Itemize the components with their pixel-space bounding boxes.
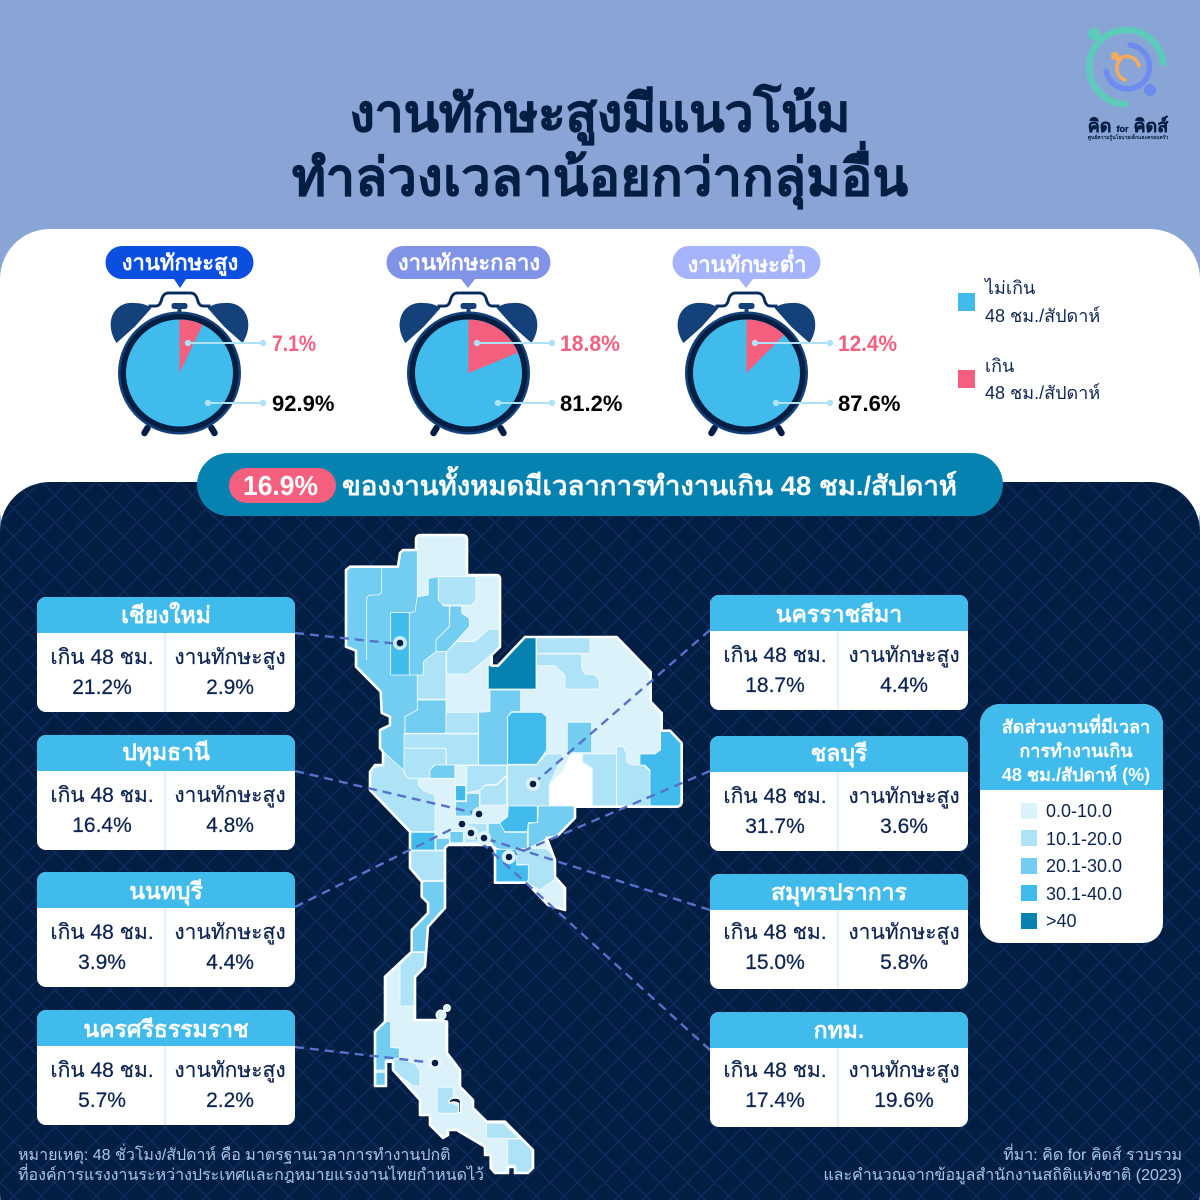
card: นครศรีธรรมราช: 5.7% xyxy=(78,1089,126,1112)
card: นนทบุรี: 3.9% xyxy=(78,951,126,974)
legend: hours: เกิน xyxy=(985,356,1014,376)
tag: งานทักษะต่ำ: งานทักษะต่ำ xyxy=(688,248,806,277)
clock: mid skill: 18.8% xyxy=(560,331,620,356)
card: นครศรีธรรมราช: งานทักษะสูง xyxy=(174,1059,286,1083)
tag: งานทักษะกลาง xyxy=(387,246,550,288)
card: นครศรีธรรมราช: นครศรีธรรมราช xyxy=(83,1016,249,1042)
clock: high skill xyxy=(111,293,334,434)
card: นนทบุรี: เกิน 48 ชม. xyxy=(50,921,154,944)
card: สมุทรปราการ xyxy=(710,874,968,989)
card: นนทบุรี xyxy=(37,872,295,987)
card: นครศรีธรรมราช: 2.2% xyxy=(206,1089,254,1112)
card: นครราชสีมา: 18.7% xyxy=(745,674,805,697)
tag: งานทักษะสูง xyxy=(106,246,254,288)
clock: mid skill: 81.2% xyxy=(560,391,622,416)
card: กทม.: กทม. xyxy=(814,1017,864,1043)
legend: hours: 48 ชม./สัปดาห์ xyxy=(985,383,1100,403)
card: กทม.: 17.4% xyxy=(745,1089,805,1112)
map legend: 48 ชม./สัปดาห์ (%) xyxy=(1002,764,1150,785)
banner xyxy=(197,453,1003,516)
legend: hours: 48 ชม./สัปดาห์ xyxy=(985,306,1100,326)
map legend: 0.0-10.0 xyxy=(1046,801,1112,821)
clock: high skill: 7.1% xyxy=(272,331,316,356)
source: และคำนวณจากข้อมูลสำนักงานสถิติแห่งชาติ (2023) xyxy=(823,1166,1182,1185)
logo: คิด for คิดส์ xyxy=(1088,28,1169,142)
card: ชลบุรี: งานทักษะสูง xyxy=(848,785,960,809)
logo: คิด for คิดส์: คิด for คิดส์ xyxy=(1088,115,1169,136)
clock: low skill xyxy=(678,293,900,434)
map legend: 30.1-40.0 xyxy=(1046,884,1122,904)
card: ชลบุรี: เกิน 48 ชม. xyxy=(723,785,827,808)
map legend: 10.1-20.0 xyxy=(1046,829,1122,849)
title: งานทักษะสูงมีแนวโน้ม xyxy=(350,83,850,146)
card: สมุทรปราการ: งานทักษะสูง xyxy=(848,921,960,945)
map legend: สัดส่วนงานที่มีเวลา xyxy=(1002,714,1150,737)
card: ปทุมธานี: เกิน 48 ชม. xyxy=(50,784,154,807)
card: เชียงใหม่: เชียงใหม่ xyxy=(121,601,211,628)
card: สมุทรปราการ: สมุทรปราการ xyxy=(771,879,908,907)
map legend: 20.1-30.0 xyxy=(1046,856,1122,876)
tag: งานทักษะสูง: งานทักษะสูง xyxy=(122,250,238,277)
card: สมุทรปราการ: 5.8% xyxy=(880,951,928,974)
card: นนทบุรี: งานทักษะสูง xyxy=(174,921,286,945)
map legend: >40 xyxy=(1046,911,1077,931)
clock: low skill: 87.6% xyxy=(838,391,900,416)
clock: high skill: 92.9% xyxy=(272,391,334,416)
card: นนทบุรี: 4.4% xyxy=(206,951,254,974)
banner: 16.9% xyxy=(243,470,318,501)
logo: คิด for คิดส์: ศูนย์ความรู้นโยบายเด็กและครอบครัว xyxy=(1088,133,1168,142)
card: กทม.: เกิน 48 ชม. xyxy=(723,1059,827,1082)
note: ที่องค์การแรงงานระหว่างประเทศและกฎหมายแรงงานไทยกำหนดไว้ xyxy=(18,1163,484,1184)
map legend: การทำงานเกิน xyxy=(1019,741,1133,761)
card: เชียงใหม่ xyxy=(37,597,295,712)
map markers xyxy=(393,636,540,1070)
card: ปทุมธานี: 16.4% xyxy=(72,814,132,837)
card: กทม. xyxy=(710,1012,968,1127)
card: นครราชสีมา: นครราชสีมา xyxy=(776,601,902,627)
card: ปทุมธานี: 4.8% xyxy=(206,814,254,837)
tag: งานทักษะต่ำ xyxy=(672,246,821,288)
card: นนทบุรี: นนทบุรี xyxy=(129,878,203,906)
card: นครศรีธรรมราช xyxy=(37,1010,295,1125)
note xyxy=(18,1143,484,1184)
source: ที่มา: คิด for คิดส์ รวบรวม xyxy=(1003,1143,1182,1164)
card: กทม.: งานทักษะสูง xyxy=(848,1059,960,1083)
title: ทำล่วงเวลาน้อยกว่ากลุ่มอื่น xyxy=(292,141,908,210)
clock: mid skill xyxy=(400,293,622,434)
card: นครราชสีมา: เกิน 48 ชม. xyxy=(723,644,827,667)
connector lines xyxy=(295,630,710,1063)
card: เชียงใหม่: 2.9% xyxy=(206,676,254,699)
card: นครราชสีมา: 4.4% xyxy=(880,674,928,697)
map of Thailand xyxy=(343,535,683,1175)
card: กทม.: 19.6% xyxy=(874,1089,934,1112)
panel: clocks white panel xyxy=(0,229,1200,559)
card: นครศรีธรรมราช: เกิน 48 ชม. xyxy=(50,1059,154,1082)
map legend xyxy=(980,704,1163,943)
card: ชลบุรี xyxy=(710,736,968,851)
banner: ของงานทั้งหมดมีเวลาการทำงานเกิน 48 ชม./สัปดาห์ xyxy=(342,465,957,501)
card: สมุทรปราการ: 15.0% xyxy=(745,951,805,974)
clock: low skill: 12.4% xyxy=(838,331,897,356)
card: ปทุมธานี: งานทักษะสูง xyxy=(174,784,286,808)
note: หมายเหตุ: 48 ชั่วโมง/สัปดาห์ คือ มาตรฐานเวลาการทำงานปกติ xyxy=(18,1143,451,1165)
source xyxy=(823,1143,1182,1185)
card: เชียงใหม่: เกิน 48 ชม. xyxy=(50,646,154,669)
card: เชียงใหม่: 21.2% xyxy=(72,676,132,699)
card: ชลบุรี: ชลบุรี xyxy=(811,740,868,768)
card: ชลบุรี: 3.6% xyxy=(880,815,928,838)
tag: งานทักษะกลาง: งานทักษะกลาง xyxy=(398,250,540,275)
card: นครราชสีมา xyxy=(710,595,968,710)
panel: dark map panel xyxy=(0,482,1200,1200)
card: ชลบุรี: 31.7% xyxy=(745,815,805,838)
legend: hours: ไม่เกิน xyxy=(983,277,1035,298)
card: เชียงใหม่: งานทักษะสูง xyxy=(174,646,286,670)
card: ปทุมธานี xyxy=(37,735,295,850)
card: นครราชสีมา: งานทักษะสูง xyxy=(848,644,960,668)
legend: hours xyxy=(958,277,1100,403)
card: สมุทรปราการ: เกิน 48 ชม. xyxy=(723,921,827,944)
card: ปทุมธานี: ปทุมธานี xyxy=(122,739,210,767)
